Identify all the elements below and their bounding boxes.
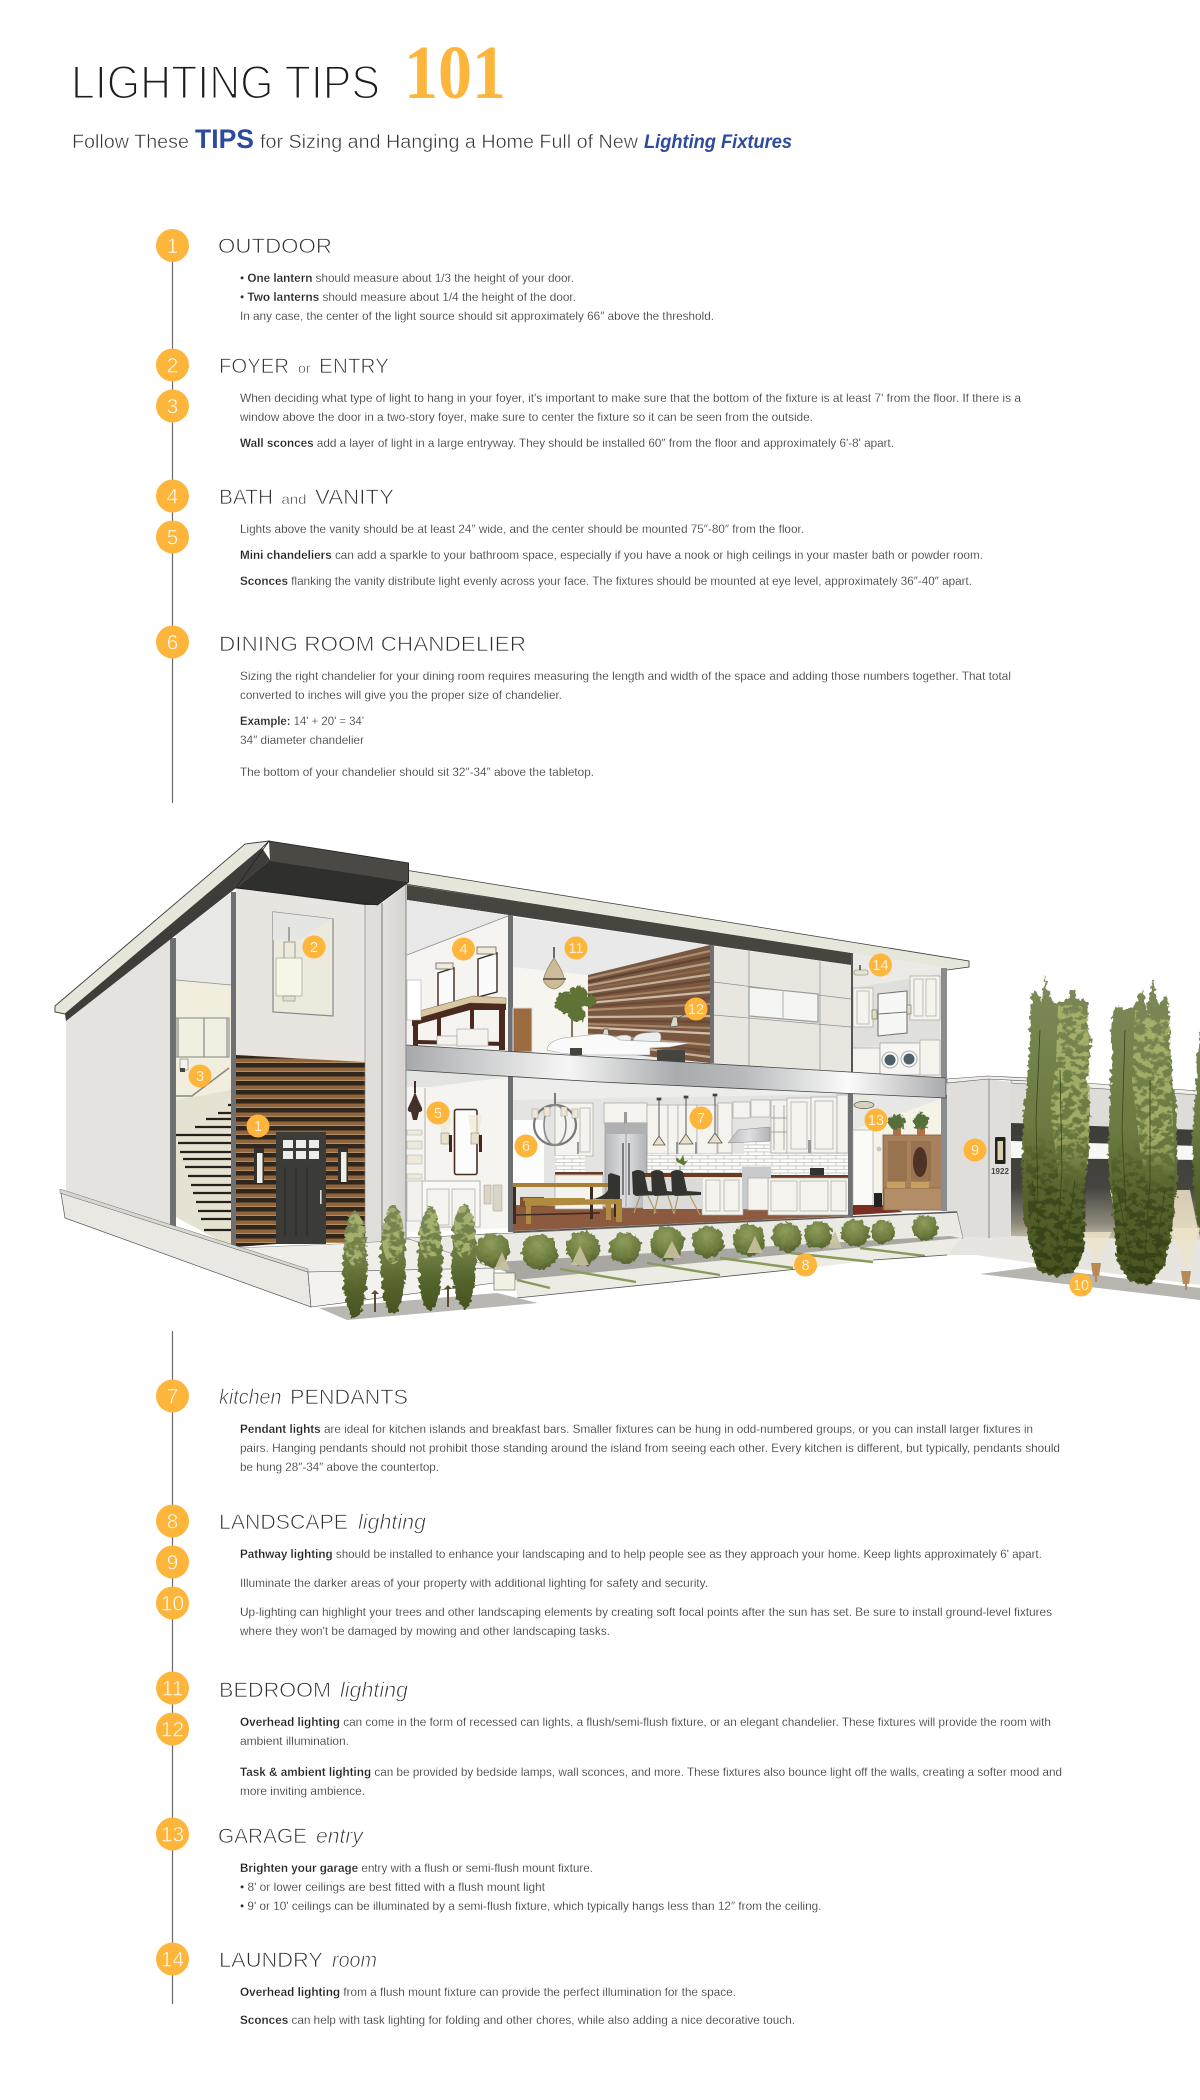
marker 4: [452, 938, 475, 960]
marker 13: 13: [868, 1113, 884, 1129]
marker 3: 3: [196, 1069, 204, 1085]
section: foyer or entry: [156, 348, 1021, 450]
section: landscape lighting: [156, 1504, 1052, 1638]
marker 10: 10: [161, 1592, 184, 1616]
front tall wall: [231, 888, 365, 1248]
marker 11: 11: [568, 941, 584, 957]
marker 5: 5: [167, 526, 178, 550]
icon: stair wall sconce: [180, 1059, 188, 1072]
upper panel wall: [714, 946, 851, 1072]
path lights: [494, 1231, 842, 1270]
marker 5: [426, 1102, 450, 1124]
heading: foyer or entry: FOYER: [219, 354, 289, 378]
marker 8: [794, 1254, 817, 1276]
icon: bedroom chandelier: [543, 947, 566, 989]
text: garage tips: • 8' or lower ceilings are best fitted with a flush mount light: [240, 1880, 546, 1894]
left post: [170, 938, 176, 1227]
text: laundry tips: [240, 1985, 795, 2027]
upper cabinets: [853, 976, 940, 1036]
upper bathroom: [407, 900, 508, 1052]
text: landscape tips: [239, 1547, 1052, 1638]
range hood: [728, 1127, 770, 1143]
icon: bollard path lights: [371, 1285, 452, 1312]
marker 6: [156, 626, 189, 658]
marker 5: [156, 520, 189, 554]
marker 9: 9: [971, 1143, 979, 1159]
text: bedroom tips: more inviting ambience.: [240, 1784, 365, 1798]
section: kitchen pendants: [156, 1380, 1060, 1474]
left side wall: [66, 939, 170, 1227]
house number markers: [188, 936, 1092, 1296]
refrigerator: [605, 1123, 647, 1208]
marker 7: 7: [697, 1111, 705, 1127]
vanity cabinet: [407, 1181, 480, 1227]
kitchen upper cabinets: [555, 1095, 848, 1156]
marker 4: 4: [459, 942, 468, 958]
gravel bed: [319, 1293, 538, 1320]
icon: dining chandelier: [532, 1093, 578, 1145]
roof eave main: [405, 870, 969, 970]
text: chandelier tips: Sizing the right chandelier for your dining room requires measuring the length and width of the space and adding those numbers together. That total: [240, 669, 1011, 683]
text: outdoor tips: [240, 271, 714, 323]
marker 1: 1: [167, 235, 178, 258]
heading: laundry room: [219, 1948, 377, 1972]
text: foyer tips: [239, 391, 1021, 450]
marker 6: 6: [522, 1139, 530, 1155]
subtitle: Lighting Fixtures: [644, 132, 792, 153]
section: bedroom lighting: [156, 1672, 1062, 1798]
wood floor: [513, 1205, 849, 1231]
bedroom post: [710, 945, 714, 1063]
house number: 1922: [991, 1167, 1009, 1176]
heading: garage entry: [218, 1824, 364, 1848]
text: laundry tips: Overhead lighting from a flush mount fixture can provide the perfect illumination for the space.: [240, 1985, 736, 1999]
text: outdoor tips: In any case, the center of the light source should sit approximately 66″ above the threshold.: [240, 309, 714, 323]
marker 1: [246, 1114, 270, 1138]
text: bath tips: Mini chandeliers can add a sparkle to your bathroom space, especially if you have a nook or high ceilings in your master bath or powder room.: [240, 548, 983, 562]
text: chandelier tips: Example: 14' + 20' = 34': [240, 714, 364, 728]
vanity mirrors: [438, 953, 497, 1006]
heading: kitchen pendants: PENDANTS: [290, 1385, 408, 1409]
roof underside: [65, 848, 270, 1021]
kitchen and dining room: [513, 1077, 849, 1232]
text: pendant tips: pairs. Hanging pendants should not prohibit those standing around the island from seeing each other. Every kitchen is different, but typically, pendants should: [240, 1441, 1060, 1455]
marker 10: [1070, 1274, 1092, 1296]
icon: bedroom sconces: [602, 1015, 684, 1037]
driveway and right-hand ground: [947, 1220, 1200, 1300]
heading: kitchen pendants: kitchen: [219, 1385, 282, 1409]
text: pendant tips: Pendant lights are ideal for kitchen islands and breakfast bars. Smaller fixtures can be hung in odd-numbered groups, or you can install larger fixtures in: [240, 1422, 1033, 1436]
stair rail: [176, 1068, 229, 1096]
text: laundry tips: Sconces can help with task lighting for folding and other chores, while also adding a nice decorative touch.: [240, 2013, 795, 2027]
mirror: [454, 1110, 477, 1174]
icon: foyer pendant: [276, 927, 302, 1001]
title text: LIGHTING TIPS: [71, 56, 380, 108]
floor slab: [406, 1045, 946, 1098]
text: garage tips: • 9' or 10' ceilings can be illuminated by a semi-flush fixture, which typically hangs less than 12″ from the ceiling.: [240, 1899, 822, 1913]
heading: garage entry: entry: [316, 1824, 364, 1848]
lower bathroom: [407, 1071, 508, 1232]
towels: [484, 1185, 502, 1211]
marker 12: 12: [688, 1002, 704, 1018]
marker 14: [869, 954, 892, 976]
heading: bath and vanity: and: [282, 491, 306, 507]
marker 12: [684, 998, 708, 1020]
marker 10: [156, 1586, 189, 1620]
text: foyer tips: window above the door in a two-story foyer, make sure to center the fixture so it can be seen from the outside.: [239, 410, 813, 424]
timeline lower: [172, 1331, 174, 2004]
text: landscape tips: Illuminate the darker areas of your property with additional lighting for safety and security.: [240, 1576, 708, 1590]
subtitle: [72, 124, 792, 154]
bar stools: [632, 1170, 701, 1215]
roof eave front: [55, 841, 269, 1014]
shrubs: [476, 1215, 938, 1270]
icon: vanity lights: [436, 947, 496, 969]
text: pendant tips: be hung 28″-34″ above the countertop.: [240, 1460, 439, 1474]
tree 1: [1022, 975, 1091, 1277]
marker 14: 14: [161, 1948, 184, 1972]
title number 101: 101: [404, 31, 506, 115]
potted plants: [889, 1113, 929, 1135]
text: garage tips: [240, 1861, 822, 1913]
marker 7: [690, 1106, 712, 1130]
icon: mini chandelier: [408, 1081, 422, 1120]
tree 2: [1108, 978, 1178, 1285]
icon: flush mount light: [854, 965, 868, 975]
heading: kitchen pendants: [219, 1385, 408, 1409]
title: [71, 31, 506, 115]
marker 14: 14: [872, 958, 889, 974]
marker 8: [156, 1504, 189, 1538]
rug: [853, 1205, 903, 1215]
text: pendant tips: [240, 1422, 1060, 1474]
heading: landscape lighting: LANDSCAPE: [219, 1510, 348, 1534]
heading: bath and vanity: BATH: [219, 485, 273, 509]
bedroom wood wall: [588, 945, 710, 1063]
bed: [547, 1032, 690, 1062]
column: [365, 885, 406, 1245]
marker 2: 2: [310, 940, 318, 956]
marker 5: 5: [434, 1106, 442, 1122]
section: garage entry: [156, 1818, 822, 1913]
heading: bedroom lighting: [219, 1678, 408, 1702]
entry mudroom: [853, 1093, 942, 1215]
columnar trees: [1022, 975, 1200, 1290]
text: bedroom tips: Task & ambient lighting can be provided by bedside lamps, wall sconces, and more. These fixtures also bounce light off the walls, creating a softer mood and: [240, 1765, 1062, 1779]
subway backsplash: [555, 1142, 848, 1176]
icon: uplights: [1091, 1263, 1191, 1290]
heading: outdoor: OUTDOOR: [218, 234, 332, 258]
marker 3: [156, 390, 189, 422]
text: chandelier tips: [240, 669, 1011, 779]
timeline upper: [172, 245, 174, 803]
back counter: [555, 1172, 603, 1209]
text: garage tips: Brighten your garage entry with a flush or semi-flush mount fixture.: [240, 1861, 593, 1875]
section: laundry room: [156, 1942, 795, 2027]
heading: bedroom lighting: BEDROOM: [219, 1678, 331, 1702]
marker 12: [156, 1712, 189, 1746]
marker 13: [864, 1108, 888, 1132]
marker 10: 10: [1073, 1278, 1089, 1294]
kitchen right post: [848, 1092, 853, 1216]
vanity: [412, 996, 506, 1050]
marker 11: [564, 936, 588, 960]
heading: bath and vanity: [219, 485, 394, 509]
marker 7: [156, 1380, 189, 1412]
heading: foyer or entry: ENTRY: [319, 354, 389, 378]
heading: garage entry: GARAGE: [218, 1824, 307, 1848]
heading: bedroom lighting: lighting: [340, 1678, 408, 1702]
marker 6: [514, 1134, 538, 1158]
text: bath tips: [240, 522, 983, 588]
marker 7: 7: [167, 1386, 178, 1408]
section: outdoor: [156, 229, 714, 323]
mudroom lockers: [883, 1135, 942, 1210]
heading: landscape lighting: lighting: [358, 1510, 426, 1534]
marker 8: 8: [801, 1258, 810, 1274]
house illustration: [55, 841, 1200, 1320]
marker 3: [188, 1064, 212, 1088]
heading: laundry room: LAUNDRY: [219, 1948, 323, 1972]
marker 1: [156, 229, 189, 262]
marker 6: 6: [167, 632, 178, 654]
marker 13: 13: [161, 1824, 184, 1846]
wood slat cladding: [236, 1055, 365, 1247]
marker 4: [156, 480, 189, 512]
text: outdoor tips: • One lantern should measure about 1/3 the height of your door.: [240, 271, 574, 285]
garage pillar: [947, 1076, 1028, 1238]
plant: [555, 986, 596, 1042]
icon: garage entry flush light: [854, 1101, 874, 1109]
text: bedroom tips: [240, 1715, 1062, 1798]
bedroom: [513, 917, 710, 1063]
marker 3: 3: [167, 396, 178, 418]
tree 3: [1192, 1000, 1200, 1255]
icon: kitchen pendants: [653, 1094, 722, 1145]
roof fascia: [407, 885, 851, 965]
text: chandelier tips: The bottom of your chandelier should sit 32″-34″ above the tabletop.: [240, 765, 594, 779]
front door: [276, 1132, 326, 1244]
text: foyer tips: When deciding what type of light to hang in your foyer, it's important to make sure that the bottom of the fixture is at least 7' from the floor. If there is a: [240, 391, 1021, 405]
section: dining room chandelier: [156, 626, 1011, 779]
stair treads: [176, 1105, 231, 1230]
laundry room: [851, 953, 947, 1078]
text: bedroom tips: ambient illumination.: [240, 1734, 349, 1748]
kitchen island: [643, 1156, 743, 1215]
garage wing: [1011, 1078, 1200, 1240]
marker 9: [156, 1546, 189, 1578]
heading: landscape lighting: [219, 1510, 426, 1534]
subtitle: for Sizing and Hanging a Home Full of New: [260, 132, 638, 153]
text: chandelier tips: 34″ diameter chandelier: [240, 733, 364, 747]
marker 9: [964, 1138, 986, 1162]
subtitle: Follow These: [72, 132, 189, 153]
marker 9: 9: [167, 1552, 178, 1574]
pavers: [494, 1236, 963, 1298]
icon: bath sconces: [438, 1115, 482, 1152]
text: landscape tips: Pathway lighting should be installed to enhance your landscaping and to help people see as they approach your home. Keep lights approximately 6' apart.: [240, 1547, 1042, 1561]
heading: foyer or entry: or: [298, 360, 311, 376]
heading: dining room chandelier: DINING ROOM CHANDELIER: [219, 632, 526, 656]
perimeter counter: [742, 1167, 849, 1215]
roof cap: [236, 841, 409, 905]
marker 2: [302, 936, 326, 958]
facade base: [406, 1212, 963, 1273]
marker 14: [156, 1942, 189, 1976]
wall fixture: [876, 1146, 882, 1152]
marker 13: [156, 1818, 189, 1850]
text: bath tips: Sconces flanking the vanity distribute light evenly across your face. The fixtures should be mounted at eye level, approximately 36″-40″ apart.: [240, 574, 972, 588]
heading: foyer or entry: [219, 354, 389, 378]
subtitle: TIPS: [195, 124, 254, 154]
marker 2: [156, 348, 189, 382]
base and porch: [60, 1189, 497, 1307]
text: landscape tips: where they won't be damaged by mowing and other landscaping tasks.: [239, 1624, 610, 1638]
section: bath and vanity: [156, 480, 983, 588]
marker 2: 2: [167, 354, 178, 378]
small front trees: [342, 1204, 476, 1318]
text: outdoor tips: • Two lanterns should measure about 1/4 the height of the door.: [240, 290, 576, 304]
upper window with foyer pendant: [273, 912, 333, 1016]
marker 1: 1: [254, 1119, 262, 1135]
marker 8: 8: [167, 1510, 178, 1534]
marker 11: [156, 1672, 189, 1704]
open shelves: [407, 1130, 422, 1179]
icon: door lanterns: [254, 1147, 348, 1183]
washer and dryer: [852, 1040, 940, 1075]
heading: bath and vanity: VANITY: [315, 485, 394, 509]
lower wall post: [508, 1075, 513, 1232]
heading: laundry room: room: [332, 1948, 377, 1972]
text: bath tips: Lights above the vanity should be at least 24″ wide, and the center should be mounted 75″-80″ from the floor.: [240, 522, 804, 536]
dining table and bench: [513, 1173, 622, 1224]
text: bedroom tips: Overhead lighting can come in the form of recessed can lights, a flush/semi-flush fixture, or an elegant chandelier. These fixtures will provide the room with: [240, 1715, 1051, 1729]
text: landscape tips: Up-lighting can highlight your trees and other landscaping elements by creating soft focal points after the sun has set. Be sure to install ground-level fixtures: [240, 1605, 1052, 1619]
marker 12: 12: [161, 1718, 184, 1742]
stair hall: [176, 893, 231, 1247]
icon: laundry sconces: [872, 1005, 911, 1019]
upper wall post: [508, 915, 513, 1052]
icon: wall lantern: [995, 1137, 1006, 1164]
text: chandelier tips: converted to inches will give you the proper size of chandelier.: [240, 688, 562, 702]
text: foyer tips: Wall sconces add a layer of light in a large entryway. They should be installed 60″ from the floor and approximately 6'-8' apart.: [240, 436, 894, 450]
marker 4: 4: [167, 486, 179, 508]
marker 11: 11: [162, 1678, 183, 1700]
glass railing: [176, 1018, 229, 1057]
